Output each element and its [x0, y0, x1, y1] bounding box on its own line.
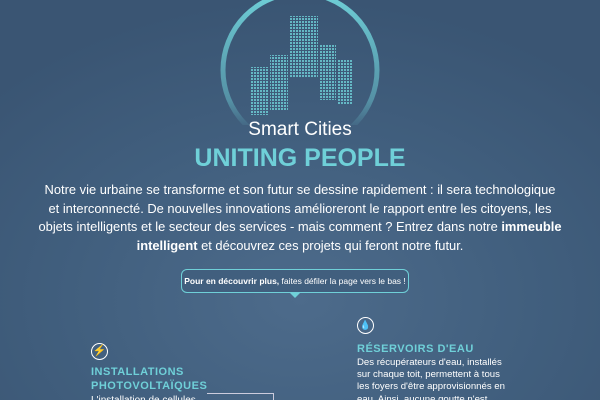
panel: water: les foyers d'être approvisionnés en: [357, 381, 505, 392]
heading: PHOTOVOLTAÏQUES: [91, 380, 207, 392]
intro text: et interconnecté. De nouvelles innovations amélioreront le rapport entre les citoyens, les: [48, 200, 552, 216]
callout bubble: Pour en découvrir plus, faites défiler la page vers le bas !: [184, 276, 406, 286]
panel: water: Des récupérateurs d'eau, installés: [357, 357, 502, 368]
title: [194, 119, 406, 172]
panel: photovoltaic: [91, 343, 207, 400]
panel: water: sur chaque toit, permettent à tous: [357, 369, 500, 380]
panel: water: [357, 317, 505, 400]
heading: RÉSERVOIRS D'EAU: [357, 343, 474, 355]
callout bubble: [181, 269, 409, 293]
icon: water drop: [357, 317, 374, 334]
title: UNITING PEOPLE: [194, 144, 406, 172]
intro text: objets intelligents et le secteur des services - mais comment ? Entrez dans notre immeuble: [38, 219, 562, 234]
icon: lightning: ⚡: [93, 345, 106, 357]
intro text: [38, 182, 562, 252]
intro text: intelligent et découvrez ces projets qui feront notre futur.: [137, 238, 463, 252]
connector line: [207, 393, 274, 400]
title: Smart Cities: [248, 119, 352, 140]
heading: INSTALLATIONS: [91, 366, 184, 378]
heading: [91, 366, 207, 392]
icon: lightning: [91, 343, 108, 360]
icon: city skyline in circle: [220, 0, 380, 125]
icon: water drop: 💧: [360, 320, 371, 330]
intro text: Notre vie urbaine se transforme et son futur se dessine rapidement : il sera technologique: [45, 182, 555, 197]
